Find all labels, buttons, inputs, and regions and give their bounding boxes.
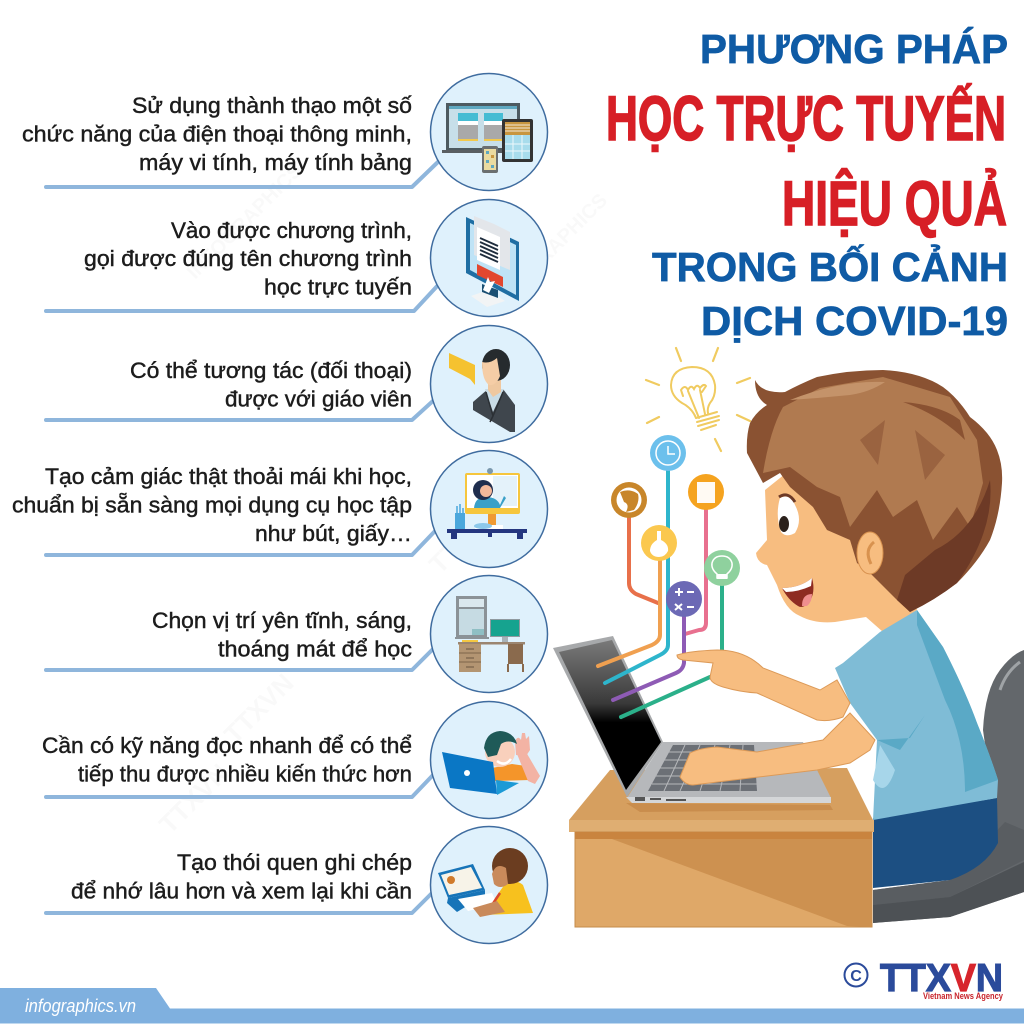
footer band — [0, 988, 1024, 1024]
tip 3: interact with teacher — [46, 326, 548, 442]
copyright mark — [844, 964, 868, 986]
icon: boy waving at laptop — [442, 731, 540, 795]
logo: TTXVN — [844, 957, 1004, 1002]
tip 7 text: để nhớ lâu hơn và xem lại khi cần — [71, 878, 412, 904]
tip 3 text: được với giáo viên — [225, 386, 412, 412]
icon: maths — [666, 581, 702, 617]
tip 2 circle — [430, 200, 548, 316]
tip 4 text: Tạo cảm giác thật thoải mái khi học, — [45, 464, 412, 489]
tip 4 text: như bút, giấy… — [255, 521, 412, 546]
tip 2 text: gọi được đúng tên chương trình — [84, 246, 412, 271]
tip 1 text — [22, 93, 412, 175]
tip 6: reading skills — [42, 702, 548, 818]
desk — [569, 768, 874, 927]
tip 7 connector — [46, 891, 434, 913]
tip 2 text — [84, 218, 412, 300]
icon: desktop video lesson — [447, 468, 527, 539]
tip 1 circle — [430, 74, 548, 190]
tip 6 connector — [46, 774, 434, 797]
tip 1 text: máy vi tính, máy tính bảng — [139, 150, 412, 175]
icon: monitor with document — [466, 216, 519, 307]
tip 1 text: Sử dụng thành thạo một số — [132, 93, 412, 118]
tip 6 text: tiếp thu được nhiều kiến thức hơn — [78, 762, 412, 786]
tip 6 text — [42, 733, 412, 786]
icon: teacher with speech bubble — [449, 349, 515, 432]
lightbulb with rays — [646, 348, 750, 451]
tip 3 circle — [430, 326, 548, 442]
text: INFOGRAPHICS — [183, 160, 307, 284]
mouth — [782, 578, 813, 607]
footer site name: infographics.vn — [25, 996, 136, 1016]
icon: laptop, tablet and phone — [442, 103, 533, 173]
icon: desk by window — [455, 596, 525, 672]
eye and brow — [778, 495, 799, 535]
idea tree icons — [611, 435, 740, 617]
text: TTXVN — [218, 668, 300, 749]
tip 1 text: chức năng của điện thoại thông minh, — [22, 122, 412, 146]
agency wordmark: TTXVN — [880, 957, 1003, 1000]
tip 2: enter programme — [46, 200, 548, 316]
tip 3 text: Có thể tương tác (đối thoại) — [130, 358, 412, 383]
icon: globe — [611, 482, 647, 518]
tip 4 text — [12, 464, 412, 546]
tip 5 text — [152, 608, 412, 662]
chair — [873, 650, 1024, 923]
face — [756, 470, 917, 632]
tip 3 text — [130, 358, 412, 412]
tip 7 text — [71, 850, 412, 904]
tip 2 text: học trực tuyến — [264, 274, 412, 300]
tip 5 text: Chọn vị trí yên tĩnh, sáng, — [152, 608, 412, 633]
tip 7 text: Tạo thói quen ghi chép — [177, 850, 412, 875]
icon: notepad — [688, 474, 724, 510]
copyright mark: C — [850, 968, 862, 985]
tip 1 connector — [46, 160, 440, 187]
tip 5 connector — [46, 648, 434, 670]
icon: child writing notes — [438, 848, 533, 917]
tip 4 text: chuẩn bị sẵn sàng mọi dụng cụ học tập — [12, 492, 412, 518]
text: INFOGRAPHICS — [488, 190, 612, 314]
tip 5: quiet place — [46, 576, 548, 692]
icon: clock — [650, 435, 686, 471]
tip 7 circle — [430, 826, 548, 944]
tip 4 circle — [430, 450, 548, 568]
tip 6 text: Cần có kỹ năng đọc nhanh để có thể — [42, 733, 412, 758]
tip 4 connector — [46, 530, 436, 555]
text: TTXVN — [153, 758, 235, 839]
icon: flask — [641, 525, 677, 561]
laptop — [553, 636, 831, 803]
pointing arm — [677, 650, 850, 721]
tip 2 text: Vào được chương trình, — [171, 218, 412, 243]
title line: phuong phap: PHƯƠNG PHÁP — [700, 26, 1008, 72]
tip 7: note taking — [46, 826, 548, 944]
title line: trong boi canh: TRONG BỐI CẢNH — [652, 244, 1008, 290]
text: TTXVN — [423, 498, 505, 579]
idea tree lines — [598, 471, 722, 717]
agency tagline: Vietnam News Agency — [923, 991, 1004, 1002]
tip 3 connector — [46, 400, 434, 420]
head and neck — [747, 370, 1002, 632]
tip 5 text: thoáng mát để học — [218, 636, 412, 662]
title — [606, 26, 1008, 344]
keyboard arm — [680, 713, 875, 785]
boy illustration — [553, 348, 1024, 927]
tip 1: device skills — [22, 74, 548, 190]
tip 5 circle — [430, 576, 548, 692]
tip 2 connector — [46, 283, 440, 311]
ear — [857, 532, 883, 574]
tip 6 circle — [430, 702, 548, 818]
tip 4: comfort and tools — [12, 450, 548, 568]
title line: dich covid: DỊCH COVID-19 — [701, 298, 1008, 344]
icon: small bulb — [704, 550, 740, 586]
shorts — [873, 798, 998, 888]
shirt — [835, 610, 998, 820]
hair — [747, 370, 1002, 612]
